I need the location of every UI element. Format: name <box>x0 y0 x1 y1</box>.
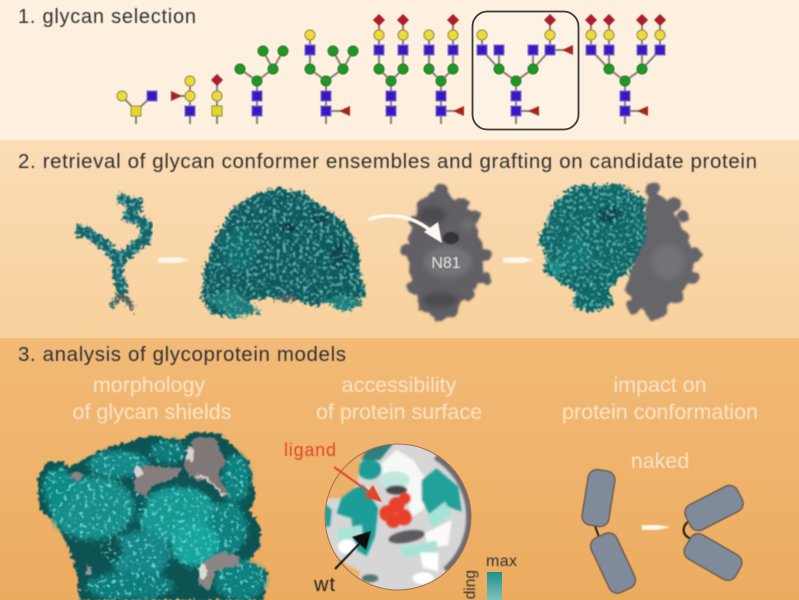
label: colour scale title: ding <box>462 570 479 599</box>
heading: step 2: 2. retrieval of glycan conformer ensembles and grafting on candidate protein <box>18 150 757 173</box>
icon: single glycan conformer <box>76 198 146 309</box>
heading: conformation column <box>562 373 758 424</box>
icon: protein surface lens <box>322 440 471 590</box>
arrow: conformational change <box>642 525 670 530</box>
heading: step 3: 3. analysis of glycoprotein models <box>18 343 346 366</box>
label: naked: naked <box>631 449 689 473</box>
icon: glycan 2 <box>171 76 195 124</box>
icon: glycan 5 <box>305 30 358 124</box>
heading: accessibility column: accessibility <box>342 373 457 397</box>
icon: grafted protein surface <box>625 183 701 322</box>
icon: glycan 3 <box>211 74 223 124</box>
panel: glycan selection background <box>0 0 799 140</box>
icon: glycan 4 <box>235 46 288 124</box>
heading: conformation column: protein conformation <box>562 400 758 424</box>
icon: glycan 9 <box>585 14 666 124</box>
label: N81: N81 <box>431 255 461 272</box>
panel: analysis background <box>0 338 799 600</box>
heading: step 1: 1. glycan selection <box>18 6 196 28</box>
panel: conformer ensembles background <box>0 140 799 338</box>
arrow: ligand pointer <box>334 467 382 502</box>
label: wt: wt <box>313 574 335 596</box>
arrow: curved grafting arrow <box>370 216 442 243</box>
icon: glycan 6 <box>373 14 409 124</box>
glycan-free protein patches <box>71 437 240 590</box>
icon: glycan 8 selected <box>477 14 573 124</box>
arrow: wt pointer <box>335 531 371 569</box>
icon: glycan conformer ensemble <box>202 188 366 318</box>
highlight box around selected glycan <box>472 12 578 130</box>
icon: glycan 1 <box>117 91 157 124</box>
icon: grafted glycan ensemble <box>538 184 646 312</box>
heading: morphology column <box>73 373 231 424</box>
icon: open conformation protein <box>581 468 638 596</box>
heading: accessibility column: of protein surface <box>316 400 482 424</box>
arrow: conformer to ensemble <box>158 257 189 263</box>
heading: morphology column: of glycan shields <box>73 400 231 424</box>
label: ligand: ligand <box>284 440 336 460</box>
icon: glycan 7 <box>424 14 464 124</box>
heading: morphology column: morphology <box>93 373 205 397</box>
icon: candidate protein surface <box>401 183 491 322</box>
arrow: protein to glycoprotein <box>503 257 534 263</box>
label: colour scale max: max <box>486 553 517 570</box>
icon: closed conformation protein <box>681 482 746 584</box>
heading: accessibility column <box>316 373 482 424</box>
heading: conformation column: impact on <box>613 373 707 397</box>
colour scale bar <box>487 572 502 600</box>
icon: glycan shield model <box>37 432 267 600</box>
